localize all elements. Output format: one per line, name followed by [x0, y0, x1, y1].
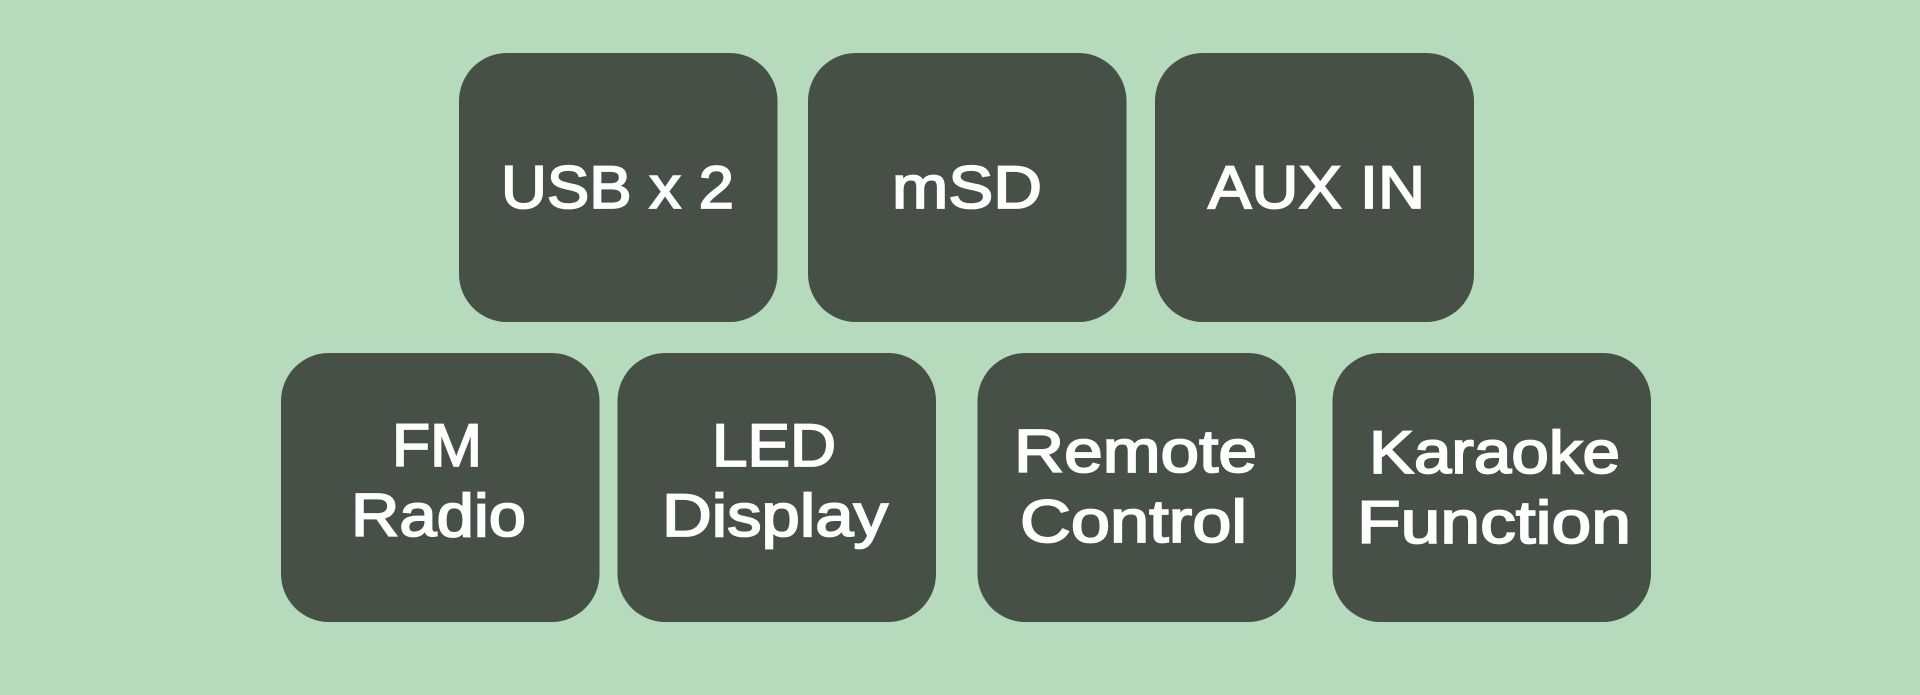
panel: Karaoke Function: [1332, 353, 1651, 622]
label: AUX IN: AUX IN: [1208, 154, 1425, 221]
label: FM Radio: Radio: [351, 482, 526, 549]
label: Karaoke Function: [1357, 419, 1631, 556]
label: mSD: mSD: [892, 154, 1042, 221]
panel: AUX IN: [1155, 53, 1474, 322]
label: Karaoke Function: Function: [1357, 489, 1631, 556]
label: FM Radio: [351, 412, 526, 549]
label: LED Display: LED: [712, 412, 836, 479]
label: Remote Control: [1014, 418, 1257, 555]
panel: mSD: [808, 53, 1126, 322]
label: USB x 2: USB x 2: [501, 154, 734, 221]
label: LED Display: Display: [662, 482, 888, 549]
label: Karaoke Function: Karaoke: [1369, 419, 1620, 486]
panel: Remote Control: [978, 353, 1296, 622]
label: Remote Control: Control: [1020, 488, 1247, 555]
panel: FM Radio: [281, 353, 600, 622]
label: FM Radio: FM: [392, 412, 482, 479]
label: Remote Control: Remote: [1014, 418, 1257, 485]
panel: USB x 2: [459, 53, 778, 322]
label: LED Display: [662, 412, 888, 549]
panel: LED Display: [618, 353, 936, 622]
